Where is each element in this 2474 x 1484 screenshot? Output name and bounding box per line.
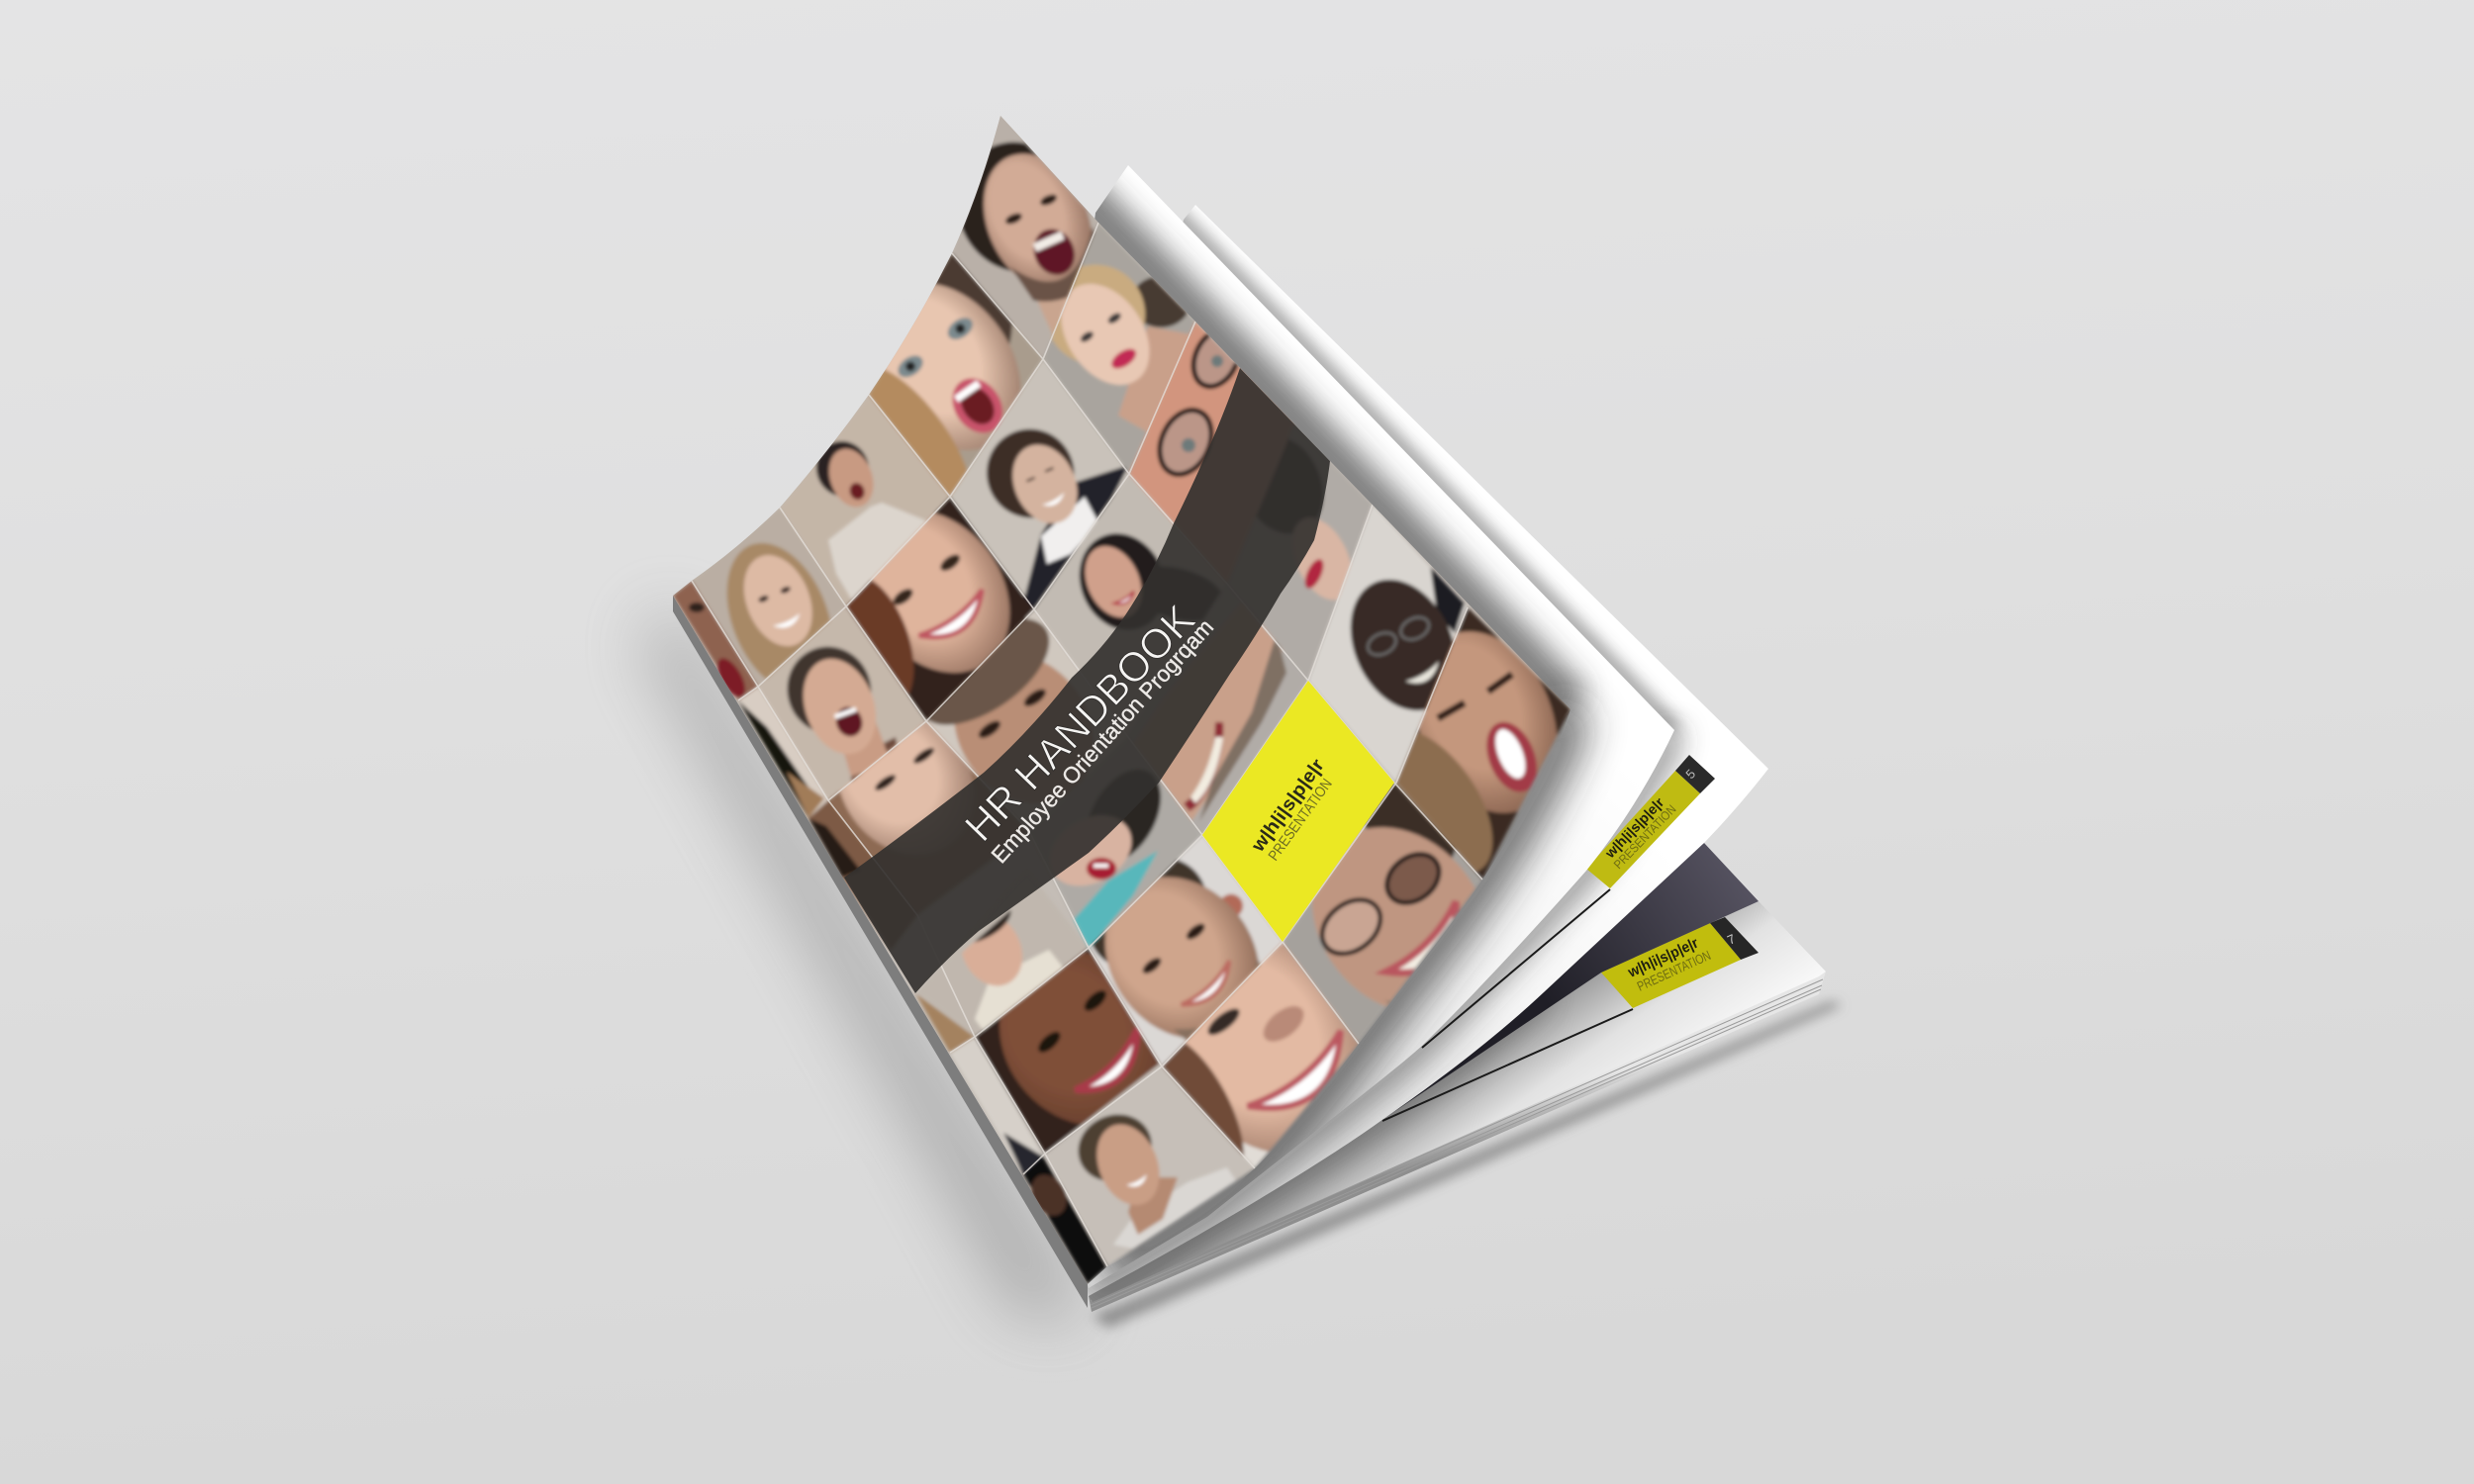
photo tile: man with brown hair [928, 607, 1079, 776]
shadow from page 1 on upper page 2 [1184, 207, 1686, 740]
photo tile: man with glasses laughing [1276, 757, 1525, 1048]
yellow logo panel [1202, 681, 1394, 942]
photo tile: black-haired woman [1033, 493, 1220, 631]
cover spine edge [673, 596, 1088, 1308]
photo tile: smiling woman [845, 496, 1035, 722]
photo tile: big smile woman [1126, 898, 1417, 1195]
photo tile: man with glasses, dark skin [1308, 505, 1476, 783]
photo tile: woman with glasses and teal top [1029, 737, 1202, 950]
tab: page 5 label: w|h|i|s|p|e|r [1601, 793, 1667, 862]
subtitle: Employee Orientation Progrqam [986, 614, 1218, 868]
photo strip: woman with dark and tan hair [738, 687, 828, 818]
yellow logo panel: w|h|i|s|p|e|r [1247, 755, 1329, 857]
page behind cover 1 [1088, 165, 1674, 1288]
photo tile: laughing woman [1350, 607, 1583, 894]
tile grid lines [692, 223, 1482, 1266]
photo tile: man in white shirt [780, 395, 950, 606]
tab: page 5 label [1586, 755, 1715, 888]
cover shadow on lower page 1 [1107, 709, 1570, 1266]
page behind cover 2 with tab [1088, 205, 1768, 1296]
tab: page 7 label: PRESENTATION [1635, 948, 1713, 994]
tab: page 7 label [1601, 917, 1759, 1008]
cover shadow on upper page 1 [1094, 175, 1602, 732]
photo strip: light tile with navy jacket [950, 1037, 1043, 1174]
photo tile: red-haired woman with glasses [1128, 323, 1293, 524]
book shadow on surface [643, 605, 1843, 1328]
photo tile: laughing man top [952, 116, 1096, 356]
photo strip: dark-haired person at bottom [1023, 1157, 1107, 1284]
tab: page 5 label: 5 [1682, 766, 1698, 782]
photo tile: woman behind band right end [1224, 421, 1373, 681]
dark title band [844, 368, 1330, 993]
photo tile: surprised woman [868, 252, 1043, 497]
dark inner page [1386, 843, 1759, 1117]
photo strip: screaming man at spine [673, 581, 758, 701]
photo tile: young man in beige shirt [917, 871, 1089, 1039]
photo strip: tan hair below band [915, 993, 975, 1053]
bottom white page with tab [1089, 901, 1826, 1302]
page 2 shadow on bottom page [1089, 992, 1544, 1296]
photo tile: blonde woman with bun [1044, 224, 1194, 472]
tab: page 7 label: w|h|i|s|p|e|r [1625, 935, 1701, 981]
page stack edge [1089, 972, 1826, 1312]
cover with photo tiles [673, 99, 1583, 1284]
photo tile: smiling man [1060, 822, 1300, 1069]
title: HR HANDBOOK [956, 596, 1203, 850]
photo tile: man in dark suit [950, 394, 1128, 609]
photo tile: blonde woman long hair [693, 509, 845, 685]
photo tile: big smile man behind band [1108, 584, 1308, 841]
photo tile: dark-skinned smiling woman [964, 916, 1207, 1161]
yellow logo panel: PRESENTATION [1265, 776, 1336, 864]
photo tile: man in blue shirt [1045, 1064, 1255, 1266]
photo tile: woman with closed eye [827, 721, 1025, 912]
photo tile: laughing young man [758, 606, 926, 800]
shadow from page 1 on lower page 2 [1089, 730, 1674, 1288]
photo strip: dark-haired person at band [809, 800, 917, 950]
tab: page 7 label: 7 [1725, 931, 1738, 948]
tab: page 5 label: PRESENTATION [1611, 802, 1679, 872]
